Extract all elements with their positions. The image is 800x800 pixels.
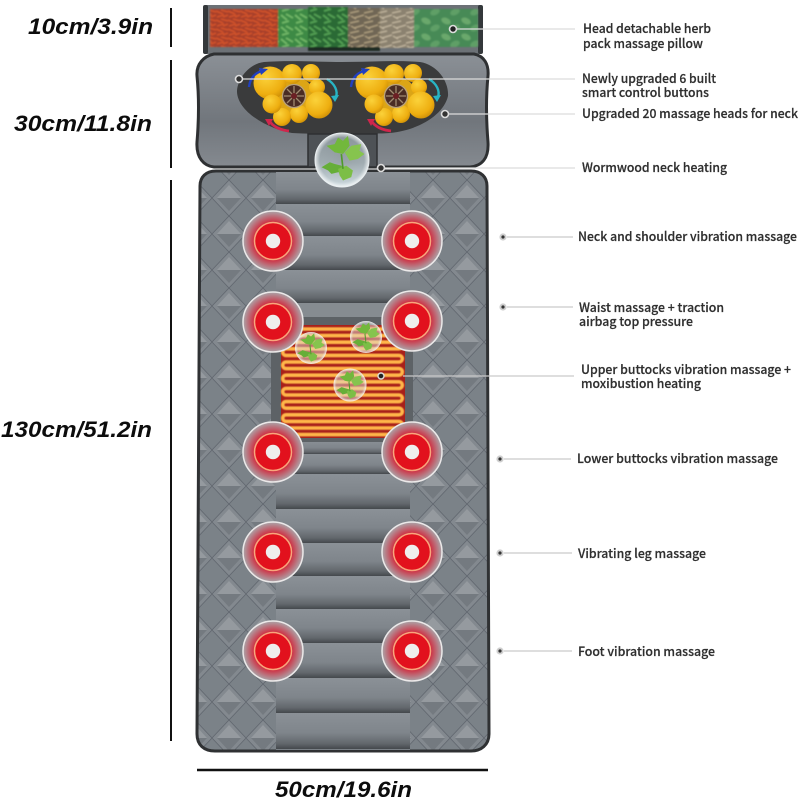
neck pillow [197, 54, 488, 167]
moxibustion bubbles [295, 321, 382, 402]
callout: wormwood neck heating: Wormwood neck heating [582, 157, 728, 176]
callout: herb pillow: Head detachable herb [583, 18, 711, 37]
callout: smart control buttons [236, 68, 716, 101]
callout: upper buttocks: Upper buttocks vibration massage + [581, 359, 791, 378]
callout: foot: Foot vibration massage [578, 641, 715, 660]
callout: upper buttocks [378, 359, 791, 392]
herb pack roll [203, 5, 483, 54]
massage heads: right cluster [351, 64, 441, 131]
callout: smart control buttons: Newly upgraded 6 built [582, 68, 716, 87]
neck connector [308, 134, 377, 167]
callout: lower buttocks: Lower buttocks vibration massage [577, 448, 778, 467]
callout: neck massage heads: Upgraded 20 massage heads for neck [582, 103, 799, 122]
center ribbed column [276, 172, 410, 750]
heating panel [271, 303, 413, 442]
callout: neck massage heads [442, 103, 799, 122]
massage heads: left cluster [249, 64, 339, 131]
callout: leg: Vibrating leg massage [577, 543, 706, 562]
callout: leg [496, 543, 706, 562]
callout: waist: Waist massage + traction [579, 297, 724, 316]
callout: upper buttocks: moxibustion heating [581, 373, 702, 392]
callout: neck and shoulder: Neck and shoulder vibration massage [578, 226, 797, 245]
dimension: herb pillow height: 10cm/3.9in [28, 14, 153, 39]
massage head panel [237, 61, 448, 134]
wormwood neck bubble [315, 133, 369, 187]
callout: foot [496, 641, 715, 660]
callout: waist [499, 297, 724, 330]
vibration pads left column [243, 211, 303, 681]
dimension: mat height: 130cm/51.2in [1, 417, 152, 442]
callout: herb pillow [450, 18, 711, 52]
dimension: neck pillow height: 30cm/11.8in [14, 111, 152, 136]
callout: smart control buttons: smart control buttons [582, 82, 709, 101]
vibration pads right column [382, 211, 442, 681]
massage mat [197, 171, 489, 751]
callout: waist: airbag top pressure [579, 311, 693, 330]
callout: wormwood neck heating [378, 157, 728, 176]
callout: herb pillow: pack massage pillow [583, 33, 704, 52]
